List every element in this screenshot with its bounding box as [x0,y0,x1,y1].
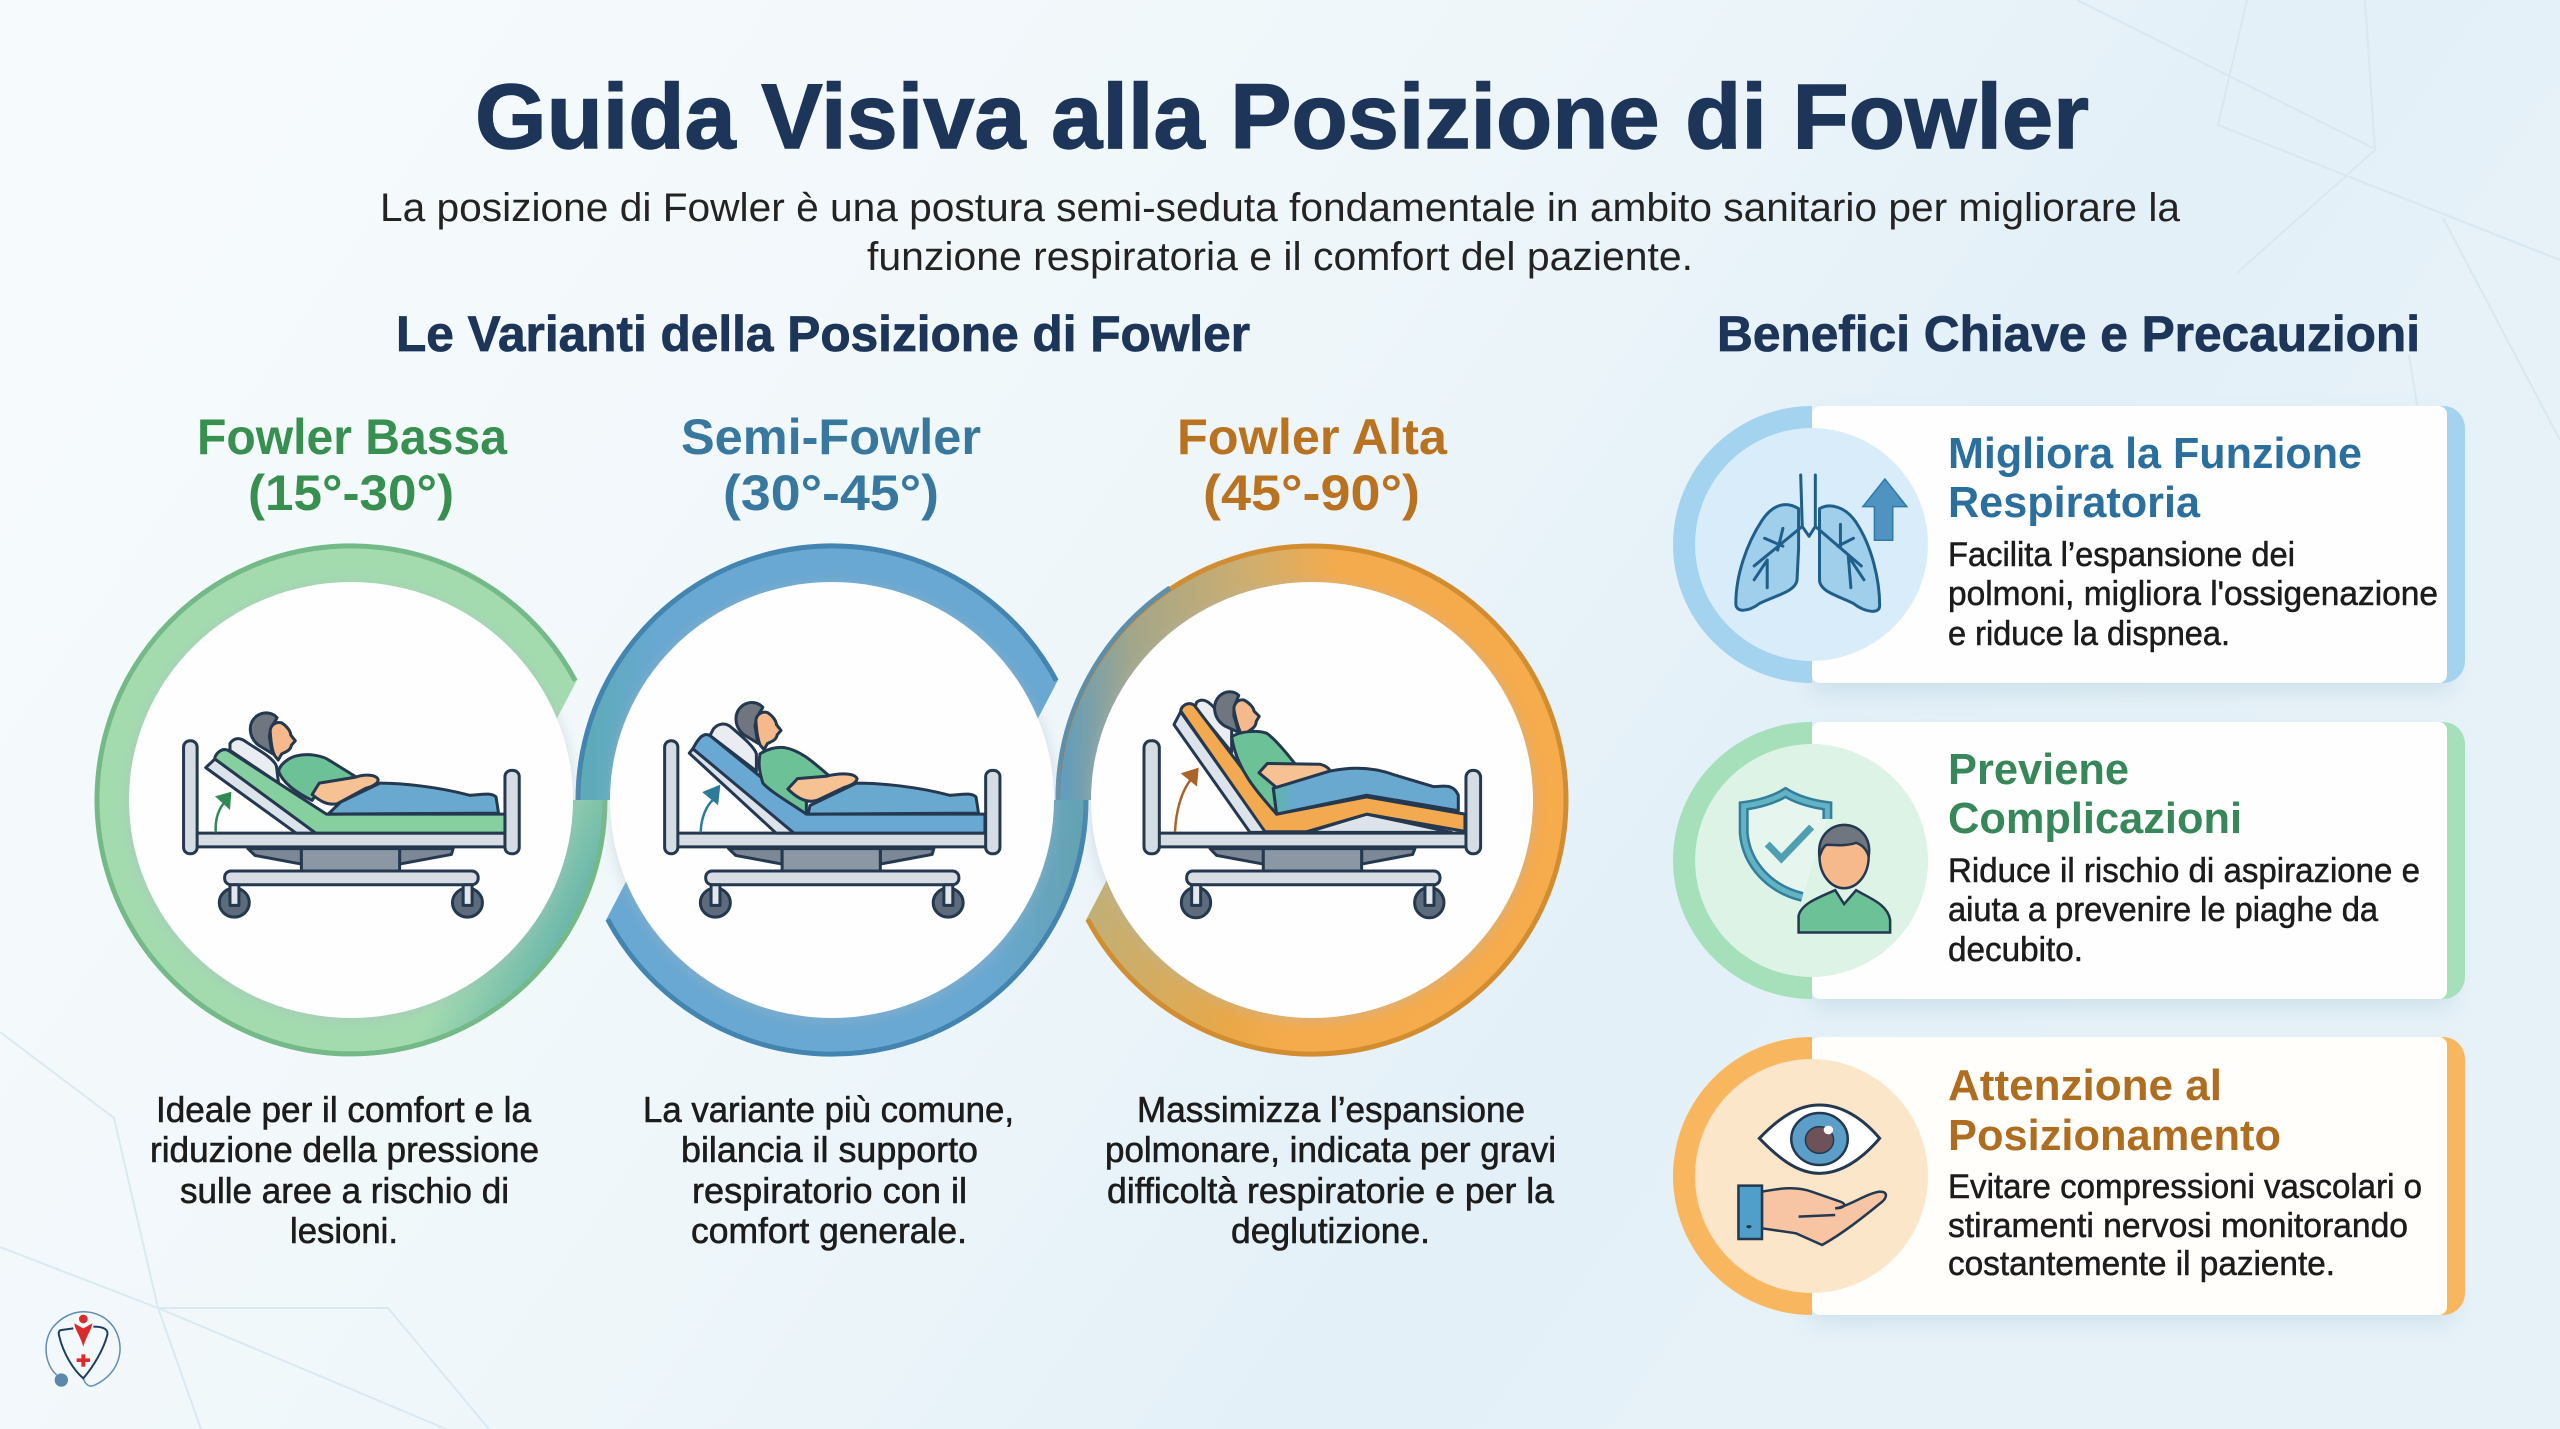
panel: Migliora la Funzione Respiratoria [1673,406,2465,692]
arrow [701,787,719,832]
title: Guida Visiva alla Posizione di Fowler [475,66,2089,168]
bed base [1144,700,1481,918]
description: Fowler Bassa: lesioni. [290,1210,398,1251]
body text: Evitare compressioni vascolari o [1948,1168,2422,1206]
heading: Attenzione al [1948,1061,2222,1110]
bed base [184,739,519,917]
label: Fowler Alta: (45°-90°) [1203,465,1420,521]
heading: benefits: Benefici Chiave e Precauzioni [1717,306,2420,362]
body text: decubito. [1948,931,2083,969]
label: Fowler Bassa: (15°-30°) [248,465,454,521]
white discs [127,582,1535,1022]
patient [736,703,979,814]
description: Fowler Alta: Massimizza l’espansione [1137,1089,1525,1130]
patient [250,713,499,814]
bed base [665,724,1000,917]
description: Fowler Bassa: sulle aree a rischio di [180,1170,509,1211]
heading: variants: Le Varianti della Posizione di Fowler [396,306,1250,362]
label: Fowler Alta: Fowler Alta [1177,409,1448,465]
label: Fowler Bassa [197,409,508,521]
description: Semi-Fowler: comfort generale. [691,1210,967,1251]
body text: Riduce il rischio di aspirazione e [1948,852,2420,890]
panel: Attenzione al Posizionamento [1673,1037,2465,1323]
body text [1948,852,2420,969]
subtitle: La posizione di Fowler è una postura semi-seduta fondamentale in ambito sanitario per migliorare la [380,186,2181,230]
body text: aiuta a prevenire le piaghe da [1948,891,2378,929]
subtitle: funzione respiratoria e il comfort del paziente. [867,235,1693,279]
description: Semi-Fowler: La variante più comune, [643,1089,1014,1130]
description: Fowler Alta: difficoltà respiratorie e per la [1107,1170,1555,1211]
arrow [1175,769,1197,832]
heading: Posizionamento [1948,1111,2281,1160]
bed illustration: Fowler Alta [1144,690,1481,918]
icon: eye and caring hand [1738,1105,1886,1245]
subtitle [380,186,2181,279]
description: Fowler Bassa: Ideale per il comfort e la [156,1089,532,1130]
ring: orange [1056,544,1568,1056]
body text [1948,536,2438,653]
description: Fowler Alta: deglutizione. [1231,1210,1430,1251]
bed illustration: Fowler Bassa [184,713,519,917]
label: Fowler Bassa: Fowler Bassa [197,409,508,465]
description: Fowler Bassa: riduzione della pressione [150,1129,539,1170]
bed illustration: Semi-Fowler [665,703,1000,917]
heading: Migliora la Funzione [1948,429,2362,478]
label: Semi-Fowler [681,409,981,521]
label: Semi-Fowler: (30°-45°) [723,465,939,521]
patient [1212,690,1458,814]
body text: costantemente il paziente. [1948,1245,2335,1283]
heading [1948,1061,2281,1160]
ring: blue [576,544,1088,1056]
panel: Previene Complicazioni [1673,722,2465,1008]
description: Semi-Fowler: bilancia il supporto [681,1129,978,1170]
icon: logo [46,1312,120,1387]
description: Semi-Fowler [643,1089,1014,1251]
body text: Facilita l’espansione dei [1948,536,2295,574]
description: Semi-Fowler: respiratorio con il [692,1170,967,1211]
label: Semi-Fowler: Semi-Fowler [681,409,981,465]
heading [1948,745,2242,843]
body text: e riduce la dispnea. [1948,615,2230,653]
arrow [216,793,230,832]
body text [1948,1168,2422,1283]
description: Fowler Alta [1105,1089,1556,1251]
heading [1948,429,2362,527]
heading: Previene [1948,745,2129,794]
description: Fowler Alta: polmonare, indicata per gravi [1105,1129,1556,1170]
ring: green [95,544,607,1056]
label: Fowler Alta [1177,409,1448,521]
icon: lungs with arrow [1736,475,1907,611]
body text: stiramenti nervosi monitorando [1948,1207,2408,1245]
body text: polmoni, migliora l'ossigenazione [1948,575,2438,613]
icon: shield and patient [1744,793,1890,932]
description: Fowler Bassa [150,1089,539,1251]
heading: Complicazioni [1948,794,2242,843]
heading: Respiratoria [1948,478,2201,527]
